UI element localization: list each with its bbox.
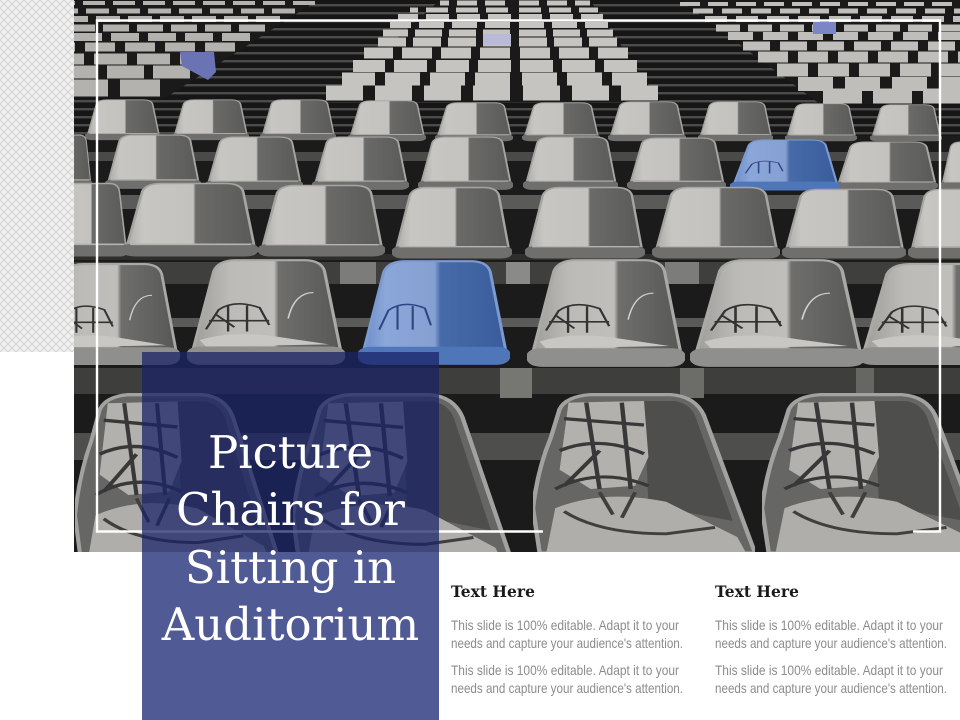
title text: Picture [208,426,373,479]
text block: left column: needs and capture your audience's attention. [451,680,683,696]
white frame [97,20,940,532]
blue seat, row 2 [358,261,510,365]
text block: left column: This slide is 100% editable. Adapt it to your [451,662,679,678]
seat row 4 [40,135,960,190]
title panel: Auditorium [161,598,419,651]
upper seat rows: center block [325,0,660,102]
text block: left column [451,582,683,696]
seat row 2 [40,260,960,367]
photo: stadium seats [40,0,960,565]
text block: right column: Text Here [715,582,799,601]
upper seat: faint lavender [483,34,511,45]
upper seat: blue right [813,22,836,34]
upper seat: blue left [180,52,216,80]
text block: left column: This slide is 100% editable. Adapt it to your [451,617,679,633]
background hatch pattern [0,0,74,352]
text block: left column: needs and capture your audience's attention. [451,635,683,651]
title panel [142,352,439,720]
upper seat rows: left block [74,0,318,98]
title panel: Sitting in [185,541,396,594]
title panel: Chairs for [176,483,405,536]
front seat row [75,395,960,565]
concrete beams and blocks [74,152,960,460]
seat row 3 [50,184,960,259]
text block: right column [715,582,947,696]
blue seat, row 4 [730,140,840,190]
upper seat rows: right block [680,0,960,104]
seat row 5 [85,100,942,141]
aisle stairs [74,0,960,136]
text block: left column: Text Here [451,582,535,601]
